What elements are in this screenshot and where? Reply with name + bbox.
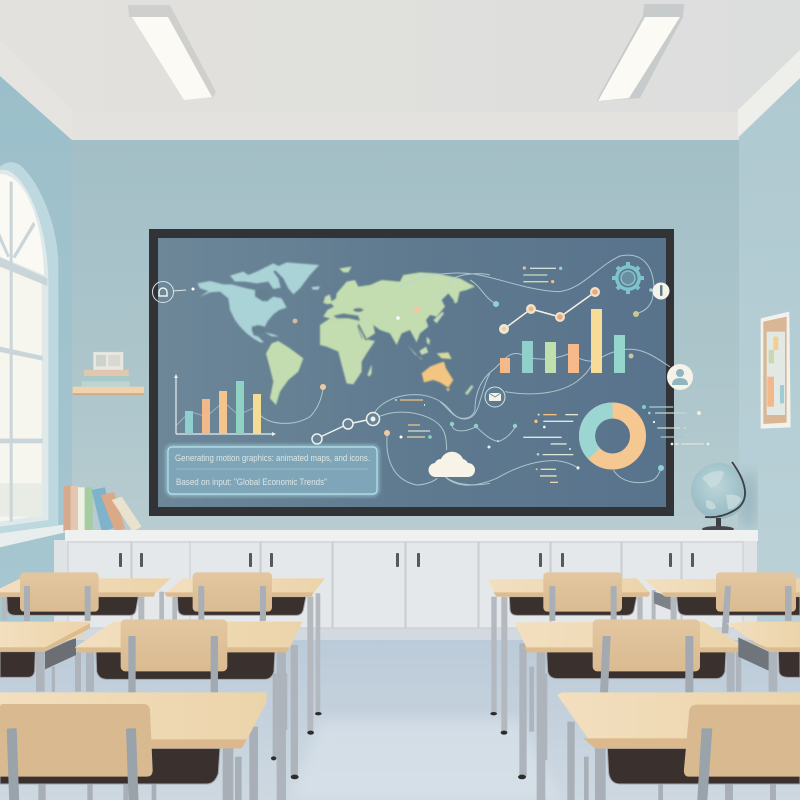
- screen frame: [149, 229, 674, 516]
- back left desk: [0, 572, 171, 621]
- right text dashes: [642, 405, 709, 445]
- line chart: [499, 287, 600, 334]
- middle far right desk: [727, 622, 800, 692]
- left badge icon: [152, 282, 194, 302]
- left bar chart: [174, 374, 276, 436]
- middle text dashes: [523, 414, 579, 482]
- eurasia, africa and australia: [320, 267, 475, 395]
- ceiling light right: [597, 4, 684, 101]
- left wall: [0, 75, 72, 600]
- caption panel: [168, 447, 377, 494]
- standing books: [63, 486, 142, 532]
- info badge: [649, 282, 670, 300]
- mail badge: [485, 387, 505, 407]
- map markers: [292, 301, 639, 390]
- right wall: [739, 78, 800, 640]
- user badge: [667, 364, 693, 390]
- inland seas: [333, 308, 367, 340]
- small text dashes centre: [384, 400, 432, 439]
- right bar chart: [500, 309, 625, 373]
- gear icon: [612, 262, 644, 294]
- ceiling light left: [128, 5, 216, 100]
- cloud icon: [428, 452, 475, 477]
- middle left desk: [0, 622, 90, 692]
- wall shelf with books and frame: [73, 352, 144, 395]
- world map: [197, 262, 475, 405]
- front right desk: [557, 692, 800, 800]
- left desks and chairs: [0, 572, 325, 800]
- top text dashes: [523, 266, 562, 283]
- arched window: [0, 162, 68, 547]
- poster: [761, 312, 791, 429]
- cabinets: [54, 530, 758, 641]
- donut chart: [587, 410, 638, 462]
- globe: [691, 462, 756, 532]
- back far right desk: [643, 572, 800, 633]
- ceiling: [0, 0, 800, 140]
- crown moulding: [0, 40, 800, 140]
- middle centre desk: [75, 619, 303, 800]
- back wall: [72, 140, 740, 535]
- caption line two: Based on input: "Global Economic Trends": [176, 477, 327, 487]
- floor: [0, 600, 800, 800]
- north and south america: [197, 262, 332, 405]
- cabinet doors: [68, 542, 743, 628]
- middle centre right desk: [514, 619, 746, 800]
- cabinet handles: [119, 553, 694, 567]
- connected nodes: [312, 412, 380, 444]
- screen: [158, 238, 666, 507]
- back middle desk: [164, 572, 325, 735]
- hudson bay and gulf: [252, 288, 270, 334]
- connector lines: [177, 255, 670, 485]
- front left desk: [0, 692, 267, 800]
- right desks and chairs: [488, 572, 800, 800]
- caption line one: Generating motion graphics: animated maps, and icons.: [175, 453, 370, 463]
- back centre right desk: [488, 572, 650, 735]
- window mullions: [0, 182, 47, 522]
- network dots: [450, 422, 664, 471]
